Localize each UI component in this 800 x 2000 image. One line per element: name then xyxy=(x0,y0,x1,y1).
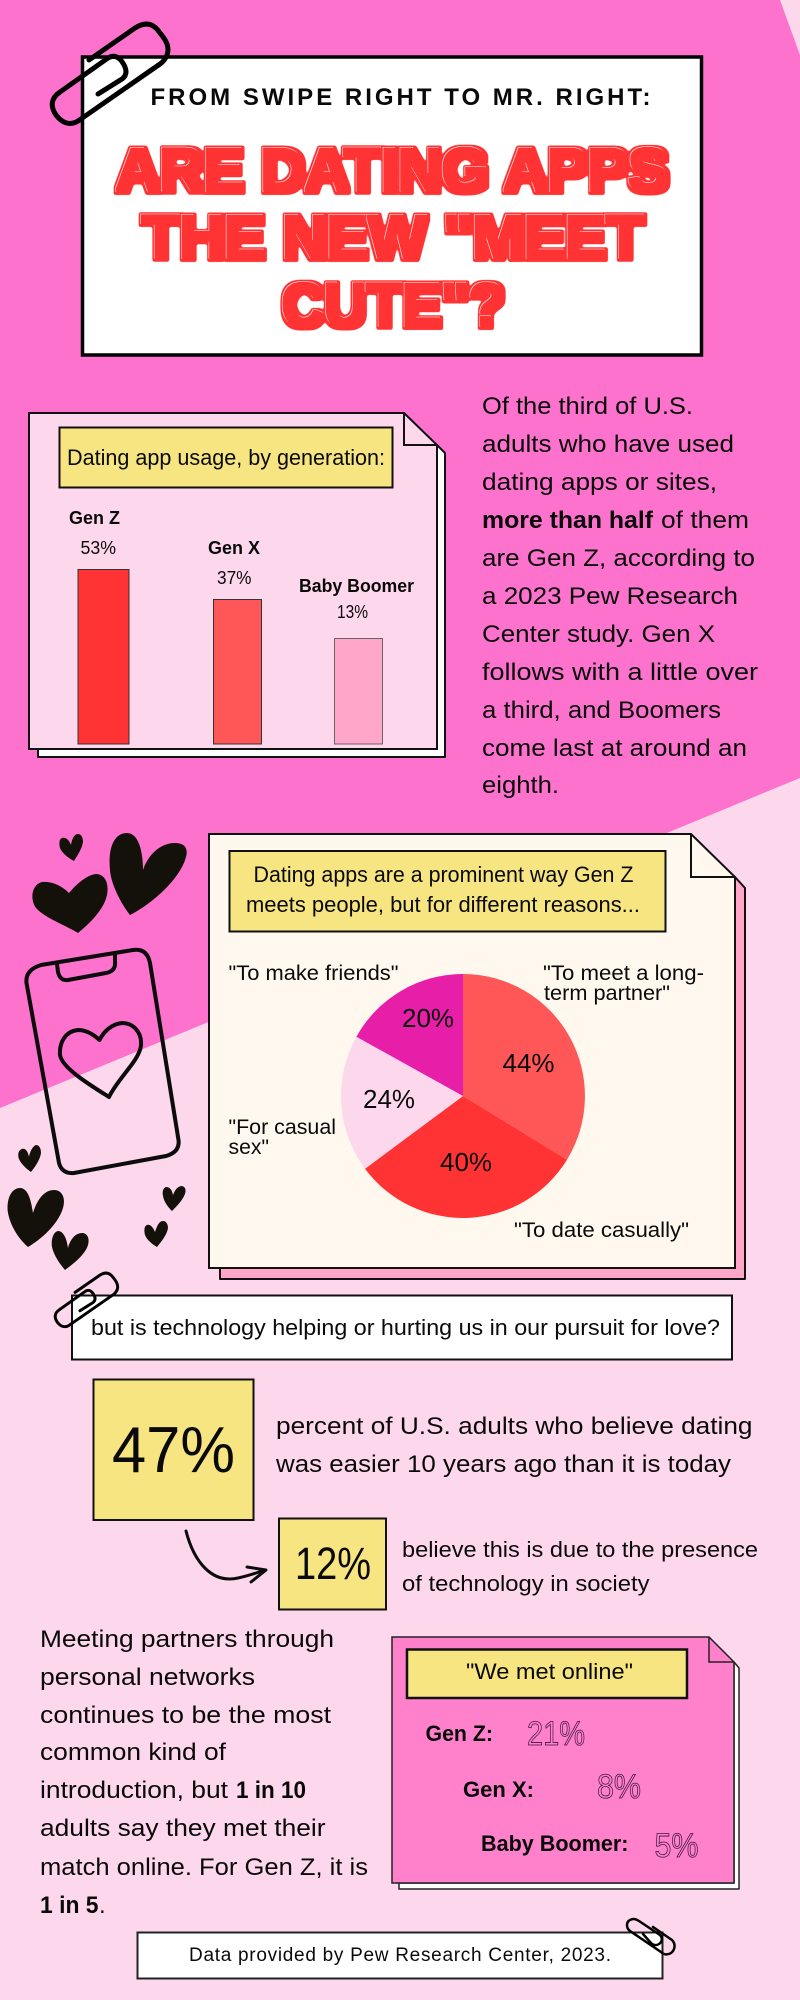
stat: 47 percent xyxy=(94,1380,254,1520)
main title xyxy=(116,137,669,339)
pie labels: sex" xyxy=(228,1136,269,1159)
main title: CUTE"? xyxy=(282,272,505,339)
footer source box: Data provided by Pew Research Center, 2023. xyxy=(189,1945,611,1966)
icon: hearts lower xyxy=(8,1145,186,1270)
text block: usage explanation: follows with a little over xyxy=(482,659,758,686)
bar chart: Gen Z xyxy=(69,508,120,528)
text block: meeting partners: 1 in 10 xyxy=(236,1777,306,1804)
bar chart: Gen X xyxy=(208,538,260,558)
main title: THE NEW "MEET xyxy=(142,204,644,271)
text block: usage explanation: more than half xyxy=(482,507,654,534)
text block: 47 percent description: percent of U.S. adults who believe dating xyxy=(276,1413,752,1440)
pie chart: 24% xyxy=(363,1084,415,1114)
generation figures: Gen Z: xyxy=(426,1721,493,1746)
generation figures: Baby Boomer: xyxy=(481,1831,628,1856)
pie chart xyxy=(341,974,585,1218)
stat: 47 percent: 47% xyxy=(112,1413,235,1486)
generation figures: 21% xyxy=(527,1715,585,1753)
bar chart: 37% xyxy=(217,568,252,588)
text block: usage explanation: a 2023 Pew Research xyxy=(482,583,738,610)
text block: usage explanation: Center study. Gen X xyxy=(482,621,715,648)
callout: question: but is technology helping or hurting us in our pursuit for love? xyxy=(91,1315,720,1340)
arrow xyxy=(186,1531,266,1582)
title panel xyxy=(82,57,702,355)
heading label xyxy=(407,1650,687,1698)
generation figures xyxy=(426,1715,698,1865)
panel: reasons for using apps xyxy=(209,834,745,1279)
pie labels xyxy=(228,962,704,1242)
icon: hearts upper xyxy=(32,833,187,933)
pie labels: "To meet a long- xyxy=(543,962,704,985)
text block: usage explanation: come last at around an xyxy=(482,735,747,762)
heading label: "We met online" xyxy=(466,1659,633,1684)
icon: phone with heart xyxy=(26,950,179,1173)
pie labels: "To date casually" xyxy=(514,1219,689,1242)
text block: usage explanation xyxy=(482,393,758,799)
text block: usage explanation: dating apps or sites, xyxy=(482,469,717,496)
callout: question xyxy=(72,1296,732,1360)
icon: paperclip on question xyxy=(55,1273,118,1327)
main title: ARE DATING APPS xyxy=(116,137,669,204)
text block: meeting partners: adults say they met their xyxy=(40,1815,326,1842)
bar chart: 53% xyxy=(80,538,116,558)
text block: meeting partners: introduction, but xyxy=(40,1777,228,1804)
heading label: Dating app usage, by generation: xyxy=(67,445,385,470)
text block: 47 percent description xyxy=(275,1413,752,1478)
bar chart: Baby Boomer xyxy=(299,576,414,596)
generation figures: 8% xyxy=(597,1768,641,1806)
text block: usage explanation: adults who have used xyxy=(482,431,734,458)
footer source box xyxy=(138,1932,662,1978)
text block: usage explanation: of them xyxy=(661,507,749,534)
text block: 12 percent description xyxy=(402,1537,758,1596)
text block: meeting partners: continues to be the most xyxy=(40,1702,331,1729)
bar chart: 13% xyxy=(337,602,368,622)
text block: 12 percent description: of technology in society xyxy=(402,1571,650,1596)
panel: usage by generation xyxy=(29,413,445,757)
generation figures: 5% xyxy=(654,1827,698,1865)
text block: meeting partners: personal networks xyxy=(40,1664,255,1691)
subtitle: FROM SWIPE RIGHT TO MR. RIGHT: xyxy=(150,84,650,111)
text block: usage explanation: are Gen Z, according to xyxy=(482,545,755,572)
text block: 47 percent description: was easier 10 years ago than it is today xyxy=(275,1451,731,1478)
pie chart: 44% xyxy=(502,1048,554,1078)
stat: 12 percent xyxy=(279,1518,386,1610)
pie labels: term partner" xyxy=(544,982,670,1005)
generation figures: Gen X: xyxy=(463,1777,534,1802)
text block: usage explanation: a third, and Boomers xyxy=(482,697,721,724)
heading label: Dating apps are a prominent way Gen Z xyxy=(254,862,634,887)
heading label: meets people, but for different reasons... xyxy=(246,892,640,917)
icon: paperclip on footer xyxy=(627,1919,675,1954)
stat: 12 percent: 12% xyxy=(295,1538,371,1589)
text block: meeting partners: match online. For Gen Z, it is xyxy=(40,1854,368,1881)
text block: meeting partners: 1 in 5 xyxy=(40,1892,98,1919)
heading label xyxy=(230,851,666,932)
text block: 12 percent description: believe this is due to the presence xyxy=(402,1537,758,1562)
bar chart xyxy=(69,508,414,744)
text block: meeting partners xyxy=(40,1626,368,1919)
text block: meeting partners: . xyxy=(99,1892,106,1919)
pie chart: 40% xyxy=(440,1147,492,1177)
icon: paperclip on title xyxy=(52,24,168,123)
pie labels: "To make friends" xyxy=(228,962,398,985)
pie labels: "For casual xyxy=(228,1116,336,1139)
text block: meeting partners: common kind of xyxy=(40,1739,226,1766)
panel: we met online xyxy=(392,1637,739,1889)
pie chart: 20% xyxy=(402,1003,454,1033)
text block: usage explanation: Of the third of U.S. xyxy=(482,393,693,420)
text block: usage explanation: eighth. xyxy=(482,772,559,799)
heading label xyxy=(60,428,392,488)
text block: meeting partners: Meeting partners through xyxy=(40,1626,334,1653)
